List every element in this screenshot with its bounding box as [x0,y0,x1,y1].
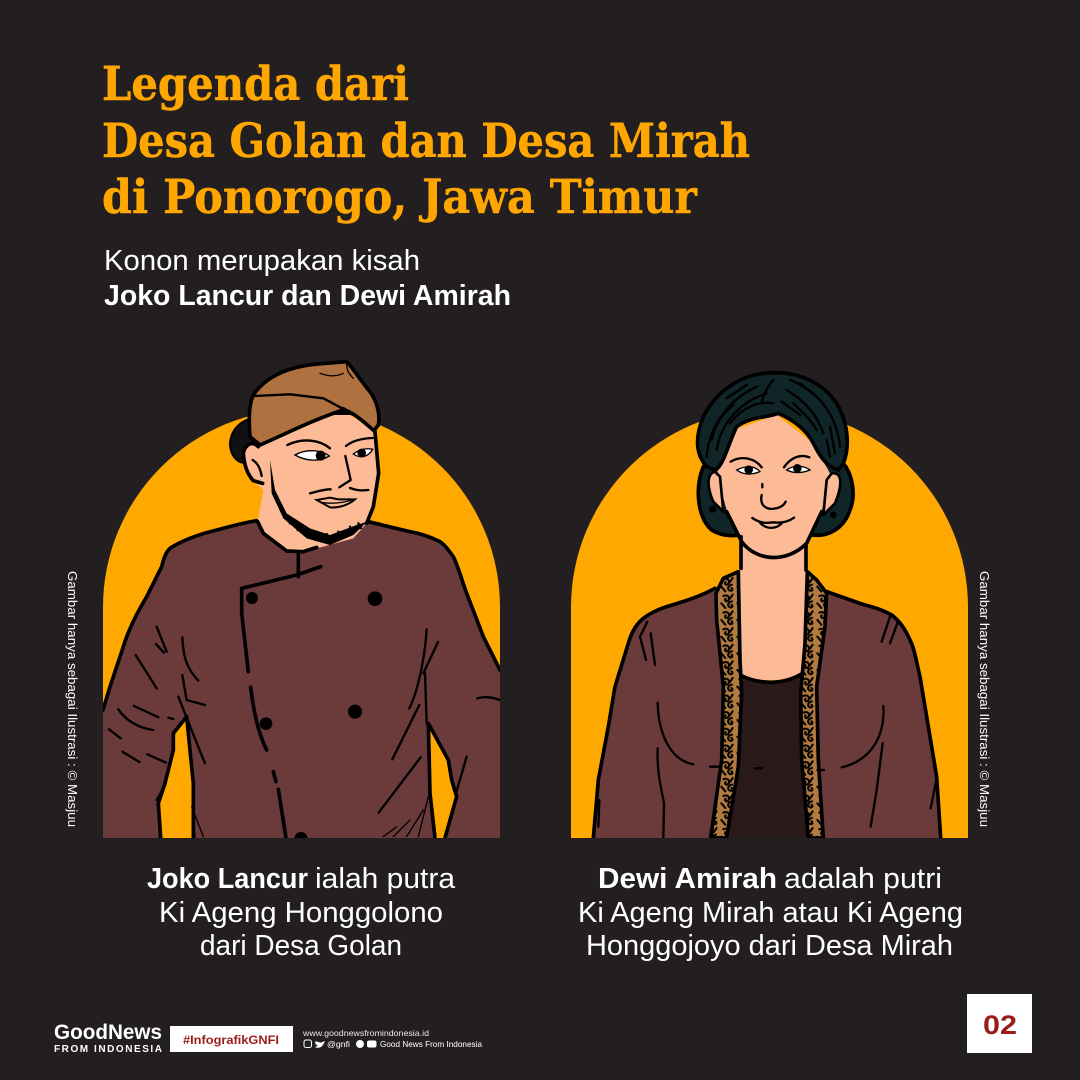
icon: twitter [315,1041,325,1048]
footer contacts: @gnfi [327,1039,350,1049]
buttons [246,591,382,845]
title: Desa Golan dan Desa Mirah [102,114,750,169]
vertical credit left: Gambar hanya sebagai Ilustrasi : © Masjuu [65,571,79,827]
title [102,57,750,225]
batik lapel left [711,572,742,838]
jacket [103,520,500,838]
icon: facebook [356,1040,364,1048]
footer contacts: Good News From Indonesia [380,1039,482,1049]
page number: 02 [983,1010,1017,1040]
caption: Joko Lancur: Ki Ageng Honggolono [159,897,443,929]
batik cap [249,362,379,445]
subtitle: Konon merupakan kisah [104,245,420,277]
caption: Dewi Amirah [578,863,963,962]
caption: Joko Lancur: Joko Lancur [147,863,308,895]
subtitle: Joko Lancur dan Dewi Amirah [104,280,511,312]
footer contacts: www.goodnewsfromindonesia.id [302,1028,429,1038]
jacket [593,588,941,838]
beard [270,460,367,545]
eyebrows [731,456,809,467]
caption: Joko Lancur: dari Desa Golan [200,930,402,962]
eyes [737,466,810,474]
mouth [752,518,794,528]
neck and chest [740,546,806,680]
figure: Dewi Amirah [593,373,941,838]
ear detail [253,460,262,476]
subtitle [104,245,511,312]
hashtag badge [170,1026,293,1052]
caption: Dewi Amirah: Ki Ageng Mirah atau Ki Ageng [578,897,963,929]
page number [967,994,1032,1053]
batik lapel right [801,572,827,838]
collar and front placket [242,554,321,838]
icon: instagram [304,1040,312,1048]
nose [339,456,351,487]
caption: Joko Lancur: ialah putra [315,863,456,895]
footer logo: FROM INDONESIA [54,1044,162,1055]
icon: youtube [367,1040,376,1048]
inner blouse [728,673,808,838]
footer logo: GoodNews [54,1021,162,1044]
eyebrows [287,438,373,448]
hair bun [230,419,253,463]
footer logo [54,1021,162,1055]
caption: Dewi Amirah: adalah putri [784,863,942,895]
title: di Ponorogo, Jawa Timur [102,170,698,225]
top hair [697,373,847,470]
caption: Joko Lancur [147,863,456,962]
back hair [698,463,853,536]
panel: Dewi Amirah illustration [571,373,968,838]
ears [709,472,840,515]
jacket creases [109,627,499,813]
hashtag badge: #InfografikGNFI [183,1033,279,1047]
footer contacts [302,1028,482,1049]
face [717,416,830,540]
bust lines [598,617,937,838]
panel: Joko Lancur illustration [103,362,500,845]
arch background left [103,409,500,838]
nose [761,484,786,509]
face [243,408,379,552]
title: Legenda dari [102,57,409,112]
arch background right [571,409,968,838]
caption: Dewi Amirah: Honggojoyo dari Desa Mirah [586,930,953,962]
figure: Joko Lancur [103,362,500,845]
moustache and mouth [310,488,368,493]
vertical credit right: Gambar hanya sebagai Ilustrasi : © Masjuu [977,571,991,827]
caption: Dewi Amirah: Dewi Amirah [598,863,777,895]
eyes [295,451,329,460]
